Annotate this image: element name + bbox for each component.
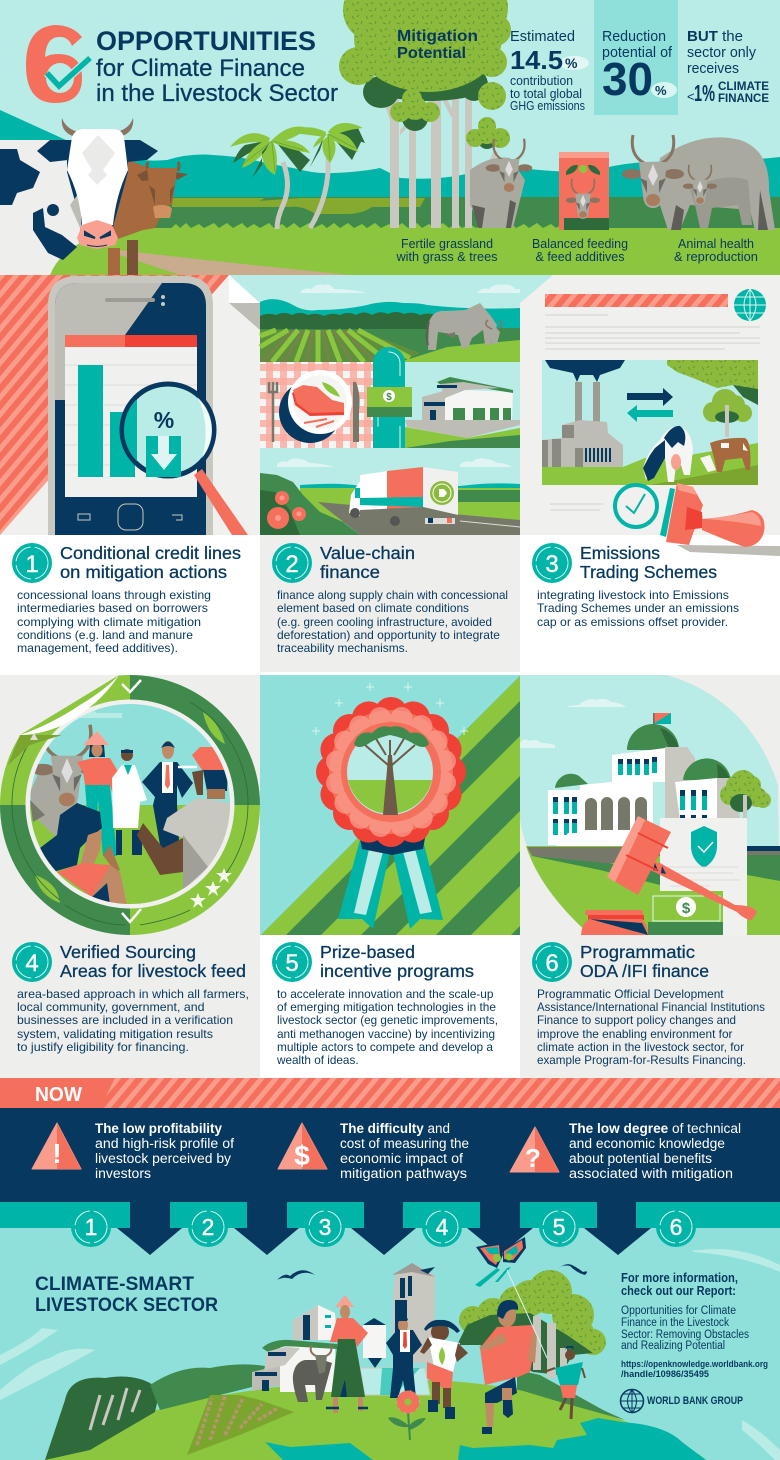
labels: mitigation pathways: & reproduction: [674, 250, 758, 264]
labels: mitigation pathways: Animal health: [678, 237, 754, 251]
badge: number 1: 1: [25, 551, 39, 578]
buildings: [252, 1263, 435, 1395]
text: more information and report: Opportunities for Climate: [621, 1305, 736, 1317]
illustration: phone with chart and magnifier: [0, 275, 260, 535]
tree cluster: [457, 1270, 606, 1412]
stat: less than 1 percent climate finance: FINANCE: [718, 93, 769, 105]
bottom background: sky: [0, 1228, 780, 1460]
text block: local community, government, and: [17, 1000, 204, 1014]
text block: area-based approach in which all farmers,: [17, 987, 249, 1001]
title: 6 Opportunities: OPPORTUNITIES: [96, 26, 316, 56]
illustration: farm, plate, warehouse and truck: [229, 275, 553, 535]
kite and birds: [277, 1237, 587, 1358]
panel: 2 value-chain finance: [229, 275, 553, 672]
heading: Programmatic: [580, 942, 695, 962]
text: difficulty: economic impact of: [340, 1151, 463, 1166]
illustration: feed bag: [559, 152, 609, 230]
heading: incentive programs: [320, 961, 474, 981]
stat: 14.5 percent: GHG emissions: [510, 99, 585, 113]
text: more information and report: check out our Report:: [621, 1284, 736, 1298]
stat: reduction potential 30 percent: %: [655, 83, 667, 98]
banner: now: [0, 1078, 780, 1108]
badge: number 3: 3: [545, 551, 559, 578]
stat: less than 1 percent climate finance: sector only: [687, 44, 756, 61]
text block: [537, 987, 765, 1067]
badge: number 4: 4: [436, 1214, 449, 1240]
text: more information and report: For more information,: [621, 1271, 738, 1285]
text: low degree: and economic knowledge: [569, 1136, 725, 1151]
illustration: large tree: [339, 0, 511, 228]
badge: number 6: [532, 942, 572, 982]
text block: cap or as emissions offset provider.: [537, 615, 728, 629]
text: difficulty: cost of measuring the: [340, 1136, 469, 1151]
stat: less than 1 percent climate finance: 1%: [694, 80, 715, 106]
panel: 5 prize-based incentive programs: [260, 675, 520, 1078]
text block: conditions (e.g. land and manure: [17, 628, 193, 642]
title: 6 Opportunities: [26, 25, 338, 107]
title: 6 Opportunities: in the Livestock Sector: [96, 80, 338, 107]
heading: Verified Sourcing: [60, 942, 196, 962]
text block: [537, 588, 739, 629]
text: low profitability: livestock perceived by: [95, 1151, 231, 1166]
text block: Programmatic Official Development: [537, 987, 724, 1001]
badge: number 6: 6: [670, 1214, 682, 1240]
badge: number 2: [272, 543, 312, 583]
text: low profitability: The low profitability: [95, 1121, 222, 1136]
text block: finance along supply chain with concessional: [277, 588, 508, 602]
badge: number 5: 5: [553, 1214, 565, 1240]
icon: dollar triangle: [278, 1123, 327, 1171]
badge: number 5: 5: [285, 950, 299, 977]
stat: mitigation potential heading: [397, 28, 478, 62]
panel: 1 conditional credit lines: [0, 275, 260, 672]
illustration: palm trees: [230, 123, 365, 229]
text block: (e.g. green cooling infrastructure, avoided: [277, 615, 492, 629]
panel: 4 verified sourcing areas: [0, 675, 260, 1078]
header illustration background: [0, 0, 780, 275]
stat: mitigation potential heading: Potential: [397, 45, 466, 62]
heading: Value-chain: [320, 543, 415, 563]
heading: [60, 543, 241, 582]
badge: number 1: [71, 1207, 111, 1247]
badge: number 1: [12, 543, 52, 583]
badge: number 6: 6: [545, 950, 559, 977]
stat: 14.5 percent: Estimated: [510, 28, 575, 45]
stat: less than 1 percent climate finance: [687, 28, 769, 106]
text: more information and report: Sector: Removing Obstacles: [621, 1329, 749, 1341]
text: low degree: about potential benefits: [569, 1151, 712, 1166]
text: low degree: associated with mitigation: [569, 1166, 733, 1181]
heading: Trading Schemes: [580, 562, 717, 582]
illustration: phone with chart and magnifier: %: [154, 407, 174, 433]
badge: number 6: [656, 1207, 696, 1247]
icon: rubber stamp: [660, 483, 780, 556]
person: suit man: [386, 1316, 422, 1398]
text block: climate action in the livestock sector, for: [537, 1040, 744, 1054]
text block: [17, 588, 211, 655]
heading: climate-smart livestock sector: [35, 1274, 218, 1316]
heading: [60, 942, 246, 981]
text block: of emerging mitigation technologies in the: [277, 1000, 496, 1014]
logo: world bank group: WORLD BANK GROUP: [647, 1395, 743, 1407]
planet ground: [45, 1370, 706, 1460]
text block: example Program-for-Results Financing.: [537, 1053, 746, 1067]
stat: reduction potential 30 percent: [594, 0, 678, 115]
badge: number 3: [305, 1207, 345, 1247]
stat: reduction potential 30 percent: 30: [602, 53, 653, 105]
badge: number 4: [12, 942, 52, 982]
text block: [276, 987, 498, 1067]
labels: mitigation pathways: with grass & trees: [395, 250, 498, 264]
text: difficulty: The difficulty and: [340, 1121, 450, 1136]
badge: number 4: [422, 1207, 462, 1247]
text: more information and report: Finance in the Livestock: [621, 1317, 729, 1329]
stat: mitigation potential heading: Mitigation: [397, 28, 478, 45]
text: difficulty: mitigation pathways: [340, 1166, 467, 1181]
heading: [580, 543, 717, 582]
text: low degree: The low degree of technical: [569, 1121, 741, 1136]
zebu: [293, 1345, 332, 1402]
badge: number 5: [272, 942, 312, 982]
text block: concessional loans through existing: [17, 588, 211, 602]
stat: 14.5 percent: [510, 28, 589, 113]
text block: intermediaries based on borrowers: [17, 601, 208, 615]
text block: [17, 987, 249, 1054]
heading: on mitigation actions: [60, 562, 227, 582]
badge: number 3: 3: [319, 1214, 331, 1240]
band: obstacles: [0, 1108, 780, 1255]
text block: wealth of ideas.: [276, 1053, 359, 1067]
text block: to justify eligibility for financing.: [17, 1040, 189, 1054]
icon: warning triangle: !: [52, 1138, 62, 1169]
text block: system, validating mitigation results: [17, 1027, 213, 1041]
badge: number 2: 2: [285, 551, 299, 578]
text: low profitability: investors: [95, 1166, 151, 1181]
illustration: farm, plate, warehouse and truck: $: [386, 392, 392, 403]
icon: warning triangle: [32, 1123, 81, 1169]
text block: to accelerate innovation and the scale-up: [277, 987, 494, 1001]
stat: less than 1 percent climate finance: receives: [687, 60, 739, 77]
text: more information and report: and Realizing Potential: [621, 1340, 725, 1352]
person: girl with leaf shirt: [420, 1320, 468, 1419]
teal ribbon with arrows: [0, 1202, 780, 1255]
illustration: government building and gavel: [520, 675, 780, 935]
stat: reduction potential 30 percent: Reduction: [602, 28, 666, 45]
labels: mitigation pathways: Balanced feeding: [532, 237, 628, 251]
badge: number 4: 4: [25, 950, 39, 977]
text block: management, feed additives).: [17, 641, 178, 655]
labels: mitigation pathways: & feed additives: [536, 250, 624, 264]
title: 6 Opportunities: for Climate Finance: [96, 55, 305, 82]
person: woman in hat: [326, 1295, 368, 1413]
heading: Emissions: [580, 543, 660, 563]
illustration: climate-smart planet scene: [45, 1237, 706, 1460]
heading: [580, 942, 709, 981]
labels: mitigation pathways: Fertile grassland: [401, 237, 493, 251]
panel: 6 programmatic ODA/IFI finance: [520, 675, 780, 1078]
text block: livestock sector (eg genetic improvements,: [277, 1013, 498, 1027]
text block: complying with climate mitigation: [17, 615, 201, 629]
text block: Trading Schemes under an emissions: [537, 601, 739, 615]
illustration: government building and gavel: $: [682, 900, 691, 917]
banner: now: NOW: [35, 1084, 82, 1106]
stat: 14.5 percent: %: [565, 55, 578, 71]
text block: integrating livestock into Emissions: [537, 588, 729, 602]
stat: 14.5 percent: 14.5: [510, 45, 563, 75]
text: low degree: [569, 1121, 741, 1181]
illustration: certificate with factory, cows and stamp: [520, 275, 780, 535]
heading: [320, 543, 415, 582]
text block: element based on climate conditions: [277, 601, 469, 615]
heading: climate-smart livestock sector: CLIMATE-SMART: [35, 1274, 194, 1295]
stat: less than 1 percent climate finance: BUT the: [687, 28, 743, 45]
badge: number 2: [188, 1207, 228, 1247]
illustration: rosette award: [260, 675, 520, 935]
illustration: zebu with calf: [622, 135, 775, 230]
heading: finance: [320, 562, 380, 582]
text: low profitability: [95, 1121, 234, 1181]
text: more information and report: /handle/10986/35495: [621, 1369, 710, 1380]
text: low profitability: and high-risk profile of: [95, 1136, 234, 1151]
forest and field: [45, 1364, 294, 1460]
text block: [277, 588, 508, 655]
person: running boy: [479, 1300, 537, 1434]
badge: number 5: [539, 1207, 579, 1247]
panel: 3 emissions trading schemes: [520, 275, 780, 672]
illustration: sticker with community: [0, 675, 260, 935]
flower: [388, 1390, 426, 1440]
heading: [320, 942, 474, 981]
heading: Prize-based: [320, 942, 415, 962]
stat: less than 1 percent climate finance: CLIMATE: [718, 81, 769, 93]
icon: dollar triangle: $: [294, 1140, 310, 1171]
icon: question triangle: [510, 1127, 559, 1173]
illustration: zebu grazing on grasslands: [470, 139, 532, 228]
stat: 14.5 percent: to total global: [510, 87, 582, 101]
illustration: holstein cow and brown cow: [0, 118, 188, 275]
text: more information and report: [621, 1271, 768, 1380]
text block: improve the enabling environment for: [537, 1027, 732, 1041]
stat: 14.5 percent: contribution: [510, 74, 573, 88]
badge: number 1: 1: [85, 1214, 97, 1240]
heading: climate-smart livestock sector: LIVESTOCK SECTOR: [35, 1295, 218, 1316]
text block: traceability mechanisms.: [277, 641, 408, 655]
text block: anti methanogen vaccine) by incentivizing: [277, 1027, 495, 1041]
text block: deforestation) and opportunity to integrate: [277, 628, 500, 642]
text: difficulty: [340, 1121, 469, 1181]
icon: big six with check: [26, 25, 90, 103]
logo: world bank group: [620, 1390, 743, 1413]
stat: reduction potential 30 percent: potential of: [602, 44, 673, 61]
heading: Conditional credit lines: [60, 543, 241, 563]
badge: number 3: [532, 543, 572, 583]
icon: question triangle: ?: [525, 1143, 541, 1173]
text block: businesses are included in a verification: [17, 1013, 233, 1027]
text block: Finance to support policy changes and: [537, 1013, 736, 1027]
heading: Areas for livestock feed: [60, 961, 246, 981]
labels: mitigation pathways: [395, 237, 758, 264]
person: small child: [544, 1346, 585, 1419]
text block: Assistance/International Financial Institutions: [537, 1000, 765, 1014]
heading: ODA /IFI finance: [580, 961, 709, 981]
stat: less than 1 percent climate finance: <: [687, 89, 695, 104]
text block: multiple actors to compete and develop a: [277, 1040, 493, 1054]
badge: number 2: 2: [202, 1214, 214, 1240]
